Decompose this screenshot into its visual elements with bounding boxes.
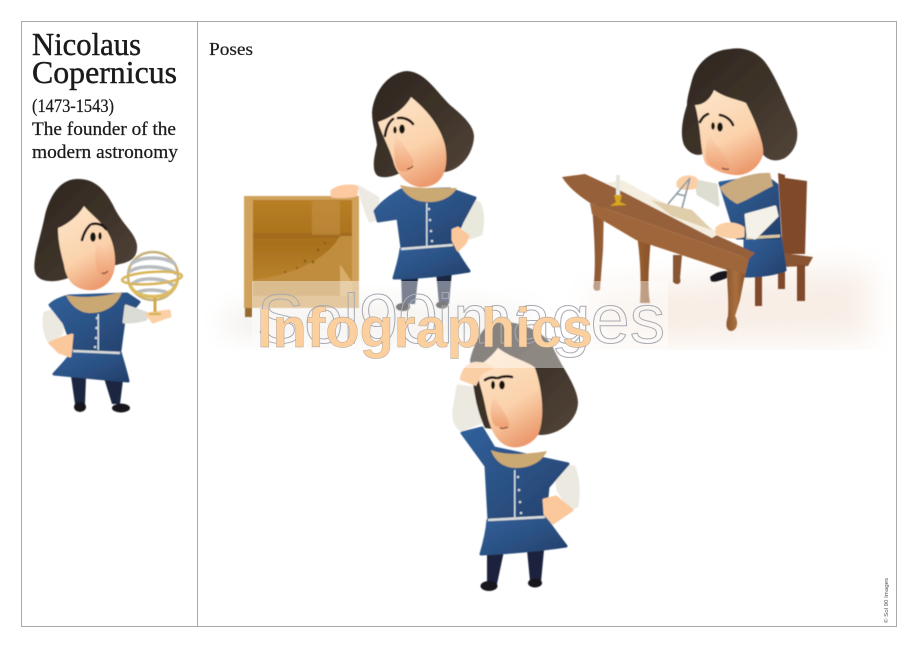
- torso: [50, 294, 139, 350]
- left sleeve: [44, 306, 64, 343]
- desk apron: [590, 203, 749, 276]
- shoes: [396, 302, 448, 311]
- collar: [491, 450, 547, 468]
- torso: [375, 189, 475, 248]
- left hand: [332, 186, 357, 197]
- mouth: [102, 271, 108, 273]
- nose: [705, 135, 729, 170]
- legs: [487, 550, 544, 584]
- drawing paper: [606, 180, 720, 238]
- sidebar divider: [196, 21, 198, 627]
- right hand: [147, 311, 170, 322]
- copyright credit: © Sol 90 Images: [883, 577, 890, 623]
- back desk leg: [673, 255, 682, 284]
- front desk leg: [726, 268, 745, 331]
- belt: [73, 351, 120, 353]
- nose: [96, 240, 113, 275]
- shoes: [480, 578, 542, 591]
- nose: [491, 396, 509, 428]
- face: [695, 90, 763, 175]
- eyes and brows: [82, 224, 106, 242]
- tunic skirt: [54, 351, 128, 381]
- hair: [682, 48, 797, 160]
- nose: [394, 136, 413, 172]
- shoes: [74, 402, 130, 412]
- hair: [34, 179, 137, 281]
- chair: [755, 173, 813, 306]
- legs: [401, 271, 452, 304]
- figure: Copernicus shading his eyes: [454, 322, 578, 591]
- desk top: [562, 174, 755, 259]
- raised sleeve: [454, 386, 482, 430]
- raised hand: [460, 362, 494, 386]
- belt: [746, 236, 780, 238]
- right hand: [544, 497, 572, 523]
- desk legs: [592, 205, 651, 303]
- hair: [470, 322, 578, 435]
- tunic skirt: [481, 517, 566, 554]
- belt: [488, 517, 545, 520]
- candle and gold holder: [610, 175, 627, 206]
- eyes and brows: [485, 376, 512, 389]
- subtitle: modern astronomy: [32, 142, 178, 163]
- near hand: [717, 224, 743, 237]
- torso: [720, 176, 780, 238]
- legs: [71, 376, 123, 404]
- tunic skirt: [394, 245, 469, 278]
- torso and raised arm: [462, 428, 568, 520]
- title: [32, 26, 177, 90]
- collar: [400, 185, 457, 202]
- shoe: [710, 271, 727, 282]
- collar: [720, 173, 773, 204]
- right hand: [453, 228, 468, 250]
- left sleeve: [359, 187, 378, 221]
- watermark: Infographics: Infographics: [257, 296, 593, 359]
- buttons: [514, 470, 522, 518]
- subtitle: The founder of the: [32, 119, 176, 140]
- floor shadows: [220, 268, 870, 345]
- section heading: poses: Poses: [209, 39, 253, 59]
- buttons: [94, 314, 99, 350]
- watermark veil: [252, 281, 668, 368]
- figure: Copernicus with wooden box: [244, 71, 483, 317]
- subtitle: [32, 119, 178, 163]
- left hand: [50, 335, 72, 356]
- near arm sleeve: [746, 207, 777, 238]
- collar: [66, 292, 122, 313]
- compass hand: [678, 177, 696, 188]
- face: [58, 206, 115, 290]
- far arm sleeve: [696, 181, 718, 205]
- armillary sphere: [122, 252, 182, 314]
- tunic skirt: [745, 236, 785, 276]
- right sleeve: [554, 464, 578, 510]
- mouth: [722, 168, 729, 169]
- life dates: (1473-1543): [32, 96, 114, 117]
- figure: Copernicus at drafting desk: [562, 48, 813, 331]
- face: [476, 348, 542, 447]
- eyes and brows: [700, 114, 733, 132]
- title: Copernicus: [32, 54, 177, 90]
- right sleeve: [124, 306, 146, 322]
- watermark: Sol90images: Sol90images: [257, 280, 665, 358]
- right sleeve: [460, 198, 483, 238]
- face: [378, 97, 446, 187]
- hair: [372, 71, 474, 177]
- wooden box: [244, 196, 359, 317]
- buttons: [426, 203, 433, 246]
- eyes and brows: [385, 118, 413, 136]
- belt: [401, 245, 453, 249]
- mouth: [407, 166, 413, 169]
- compass: [668, 178, 690, 208]
- title: Nicolaus: [32, 26, 141, 62]
- mouth: [500, 427, 508, 428]
- figure: Copernicus holding armillary sphere: [34, 179, 182, 412]
